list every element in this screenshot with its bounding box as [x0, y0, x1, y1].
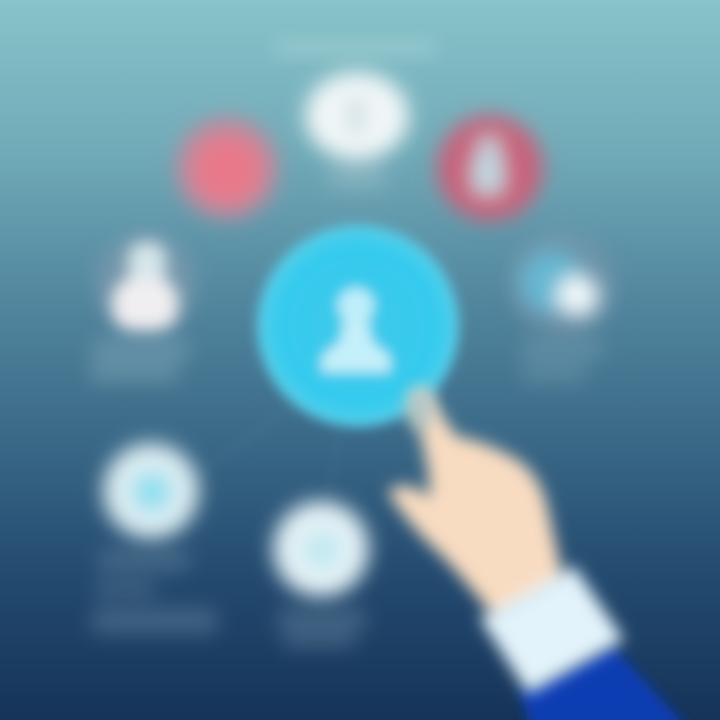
- fingertip tint: [405, 386, 435, 430]
- label: left person: [90, 340, 190, 381]
- node: right: [509, 231, 615, 337]
- hand pointing: [388, 386, 690, 720]
- label: bottom center: [278, 608, 366, 648]
- person figure: [112, 242, 178, 330]
- label: right: [520, 340, 604, 381]
- node: top left red: [176, 117, 278, 219]
- node: bottom left: [103, 443, 199, 539]
- right ring: [509, 231, 615, 337]
- node: bottom center: [273, 501, 369, 597]
- node: top right red: [437, 115, 543, 221]
- connector lines: [190, 400, 340, 510]
- title placeholder: [275, 38, 435, 58]
- sleeve: [520, 645, 690, 720]
- node: top white: [305, 72, 409, 188]
- hand and finger: [388, 391, 566, 625]
- label: bottom left: [92, 550, 217, 634]
- person ring: [96, 234, 196, 334]
- right icon: [520, 250, 599, 317]
- central hub: [257, 225, 459, 427]
- cuff: [480, 566, 624, 694]
- node: left person: [96, 234, 196, 334]
